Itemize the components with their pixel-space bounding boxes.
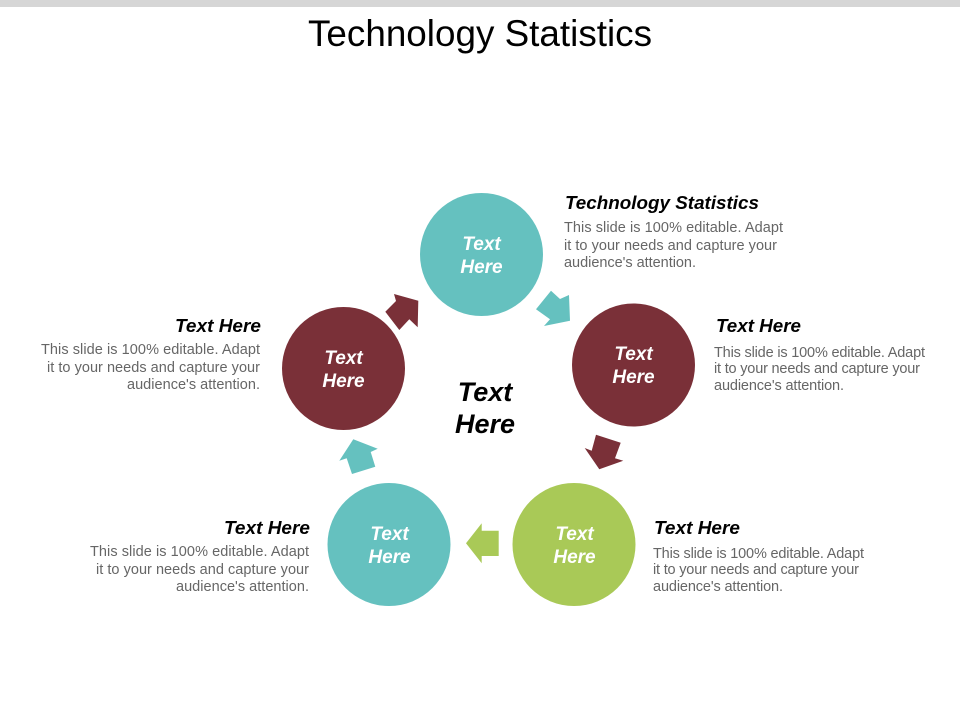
circle: right maroon: [572, 304, 695, 426]
text block: top right: [564, 192, 783, 271]
text block: bottom right: This slide is 100% editable. Adapt: [653, 546, 864, 562]
center label: [455, 377, 515, 439]
circle: right maroon: Here: [612, 367, 655, 388]
text block: right: Text Here: [716, 315, 801, 336]
circle: top teal: Here: [460, 257, 503, 278]
text block: left: it to your needs and capture your: [47, 360, 260, 376]
text block: right: This slide is 100% editable. Adapt: [714, 345, 925, 361]
text block: right: it to your needs and capture your: [714, 361, 920, 377]
text block: bottom left: Text Here: [224, 517, 310, 538]
circle: bottom right green: [512, 483, 636, 606]
center label: Here: [455, 409, 515, 439]
text block: bottom left: [90, 517, 310, 595]
text block: left: This slide is 100% editable. Adapt: [41, 342, 260, 358]
circle: top teal: [420, 193, 543, 316]
text block: left: audience's attention.: [127, 377, 260, 393]
text block: bottom right: it to your needs and capture your: [653, 562, 859, 578]
text block: right: [714, 315, 925, 394]
text block: left: Text Here: [175, 315, 261, 336]
text block: bottom left: it to your needs and capture your: [96, 562, 309, 578]
circle: top teal: Text: [462, 234, 501, 255]
text block: top right: This slide is 100% editable. Adapt: [564, 220, 783, 236]
circle: right maroon: Text: [614, 344, 653, 365]
text block: bottom left: audience's attention.: [176, 579, 309, 595]
arrow: bottom left to left: [339, 439, 378, 474]
text block: top right: audience's attention.: [564, 255, 696, 271]
arrow: left to top: [385, 294, 418, 330]
text block: bottom right: audience's attention.: [653, 579, 783, 595]
circle: bottom right green: Here: [553, 547, 596, 568]
center label: Text: [458, 377, 513, 407]
circle: bottom right green: Text: [555, 524, 594, 545]
text block: top right: Technology Statistics: [565, 192, 759, 213]
circle: bottom left teal: [328, 483, 450, 606]
circle: bottom left teal: Text: [370, 524, 409, 545]
arrow: top to right: [536, 291, 570, 326]
circle: left maroon: Text: [324, 348, 363, 369]
text block: bottom right: [653, 517, 864, 595]
arrow: bottom right to bottom left: [466, 523, 499, 563]
text block: left: [41, 315, 261, 393]
circle: left maroon: Here: [322, 371, 365, 392]
circle: bottom left teal: Here: [368, 547, 411, 568]
text block: bottom left: This slide is 100% editable. Adapt: [90, 544, 309, 560]
text block: top right: it to your needs and capture your: [564, 238, 777, 254]
circle: left maroon: [282, 307, 405, 430]
arrow: right to bottom right: [585, 435, 623, 469]
title: Technology Statistics: [308, 13, 652, 54]
text block: right: audience's attention.: [714, 378, 844, 394]
text block: bottom right: Text Here: [654, 517, 740, 538]
